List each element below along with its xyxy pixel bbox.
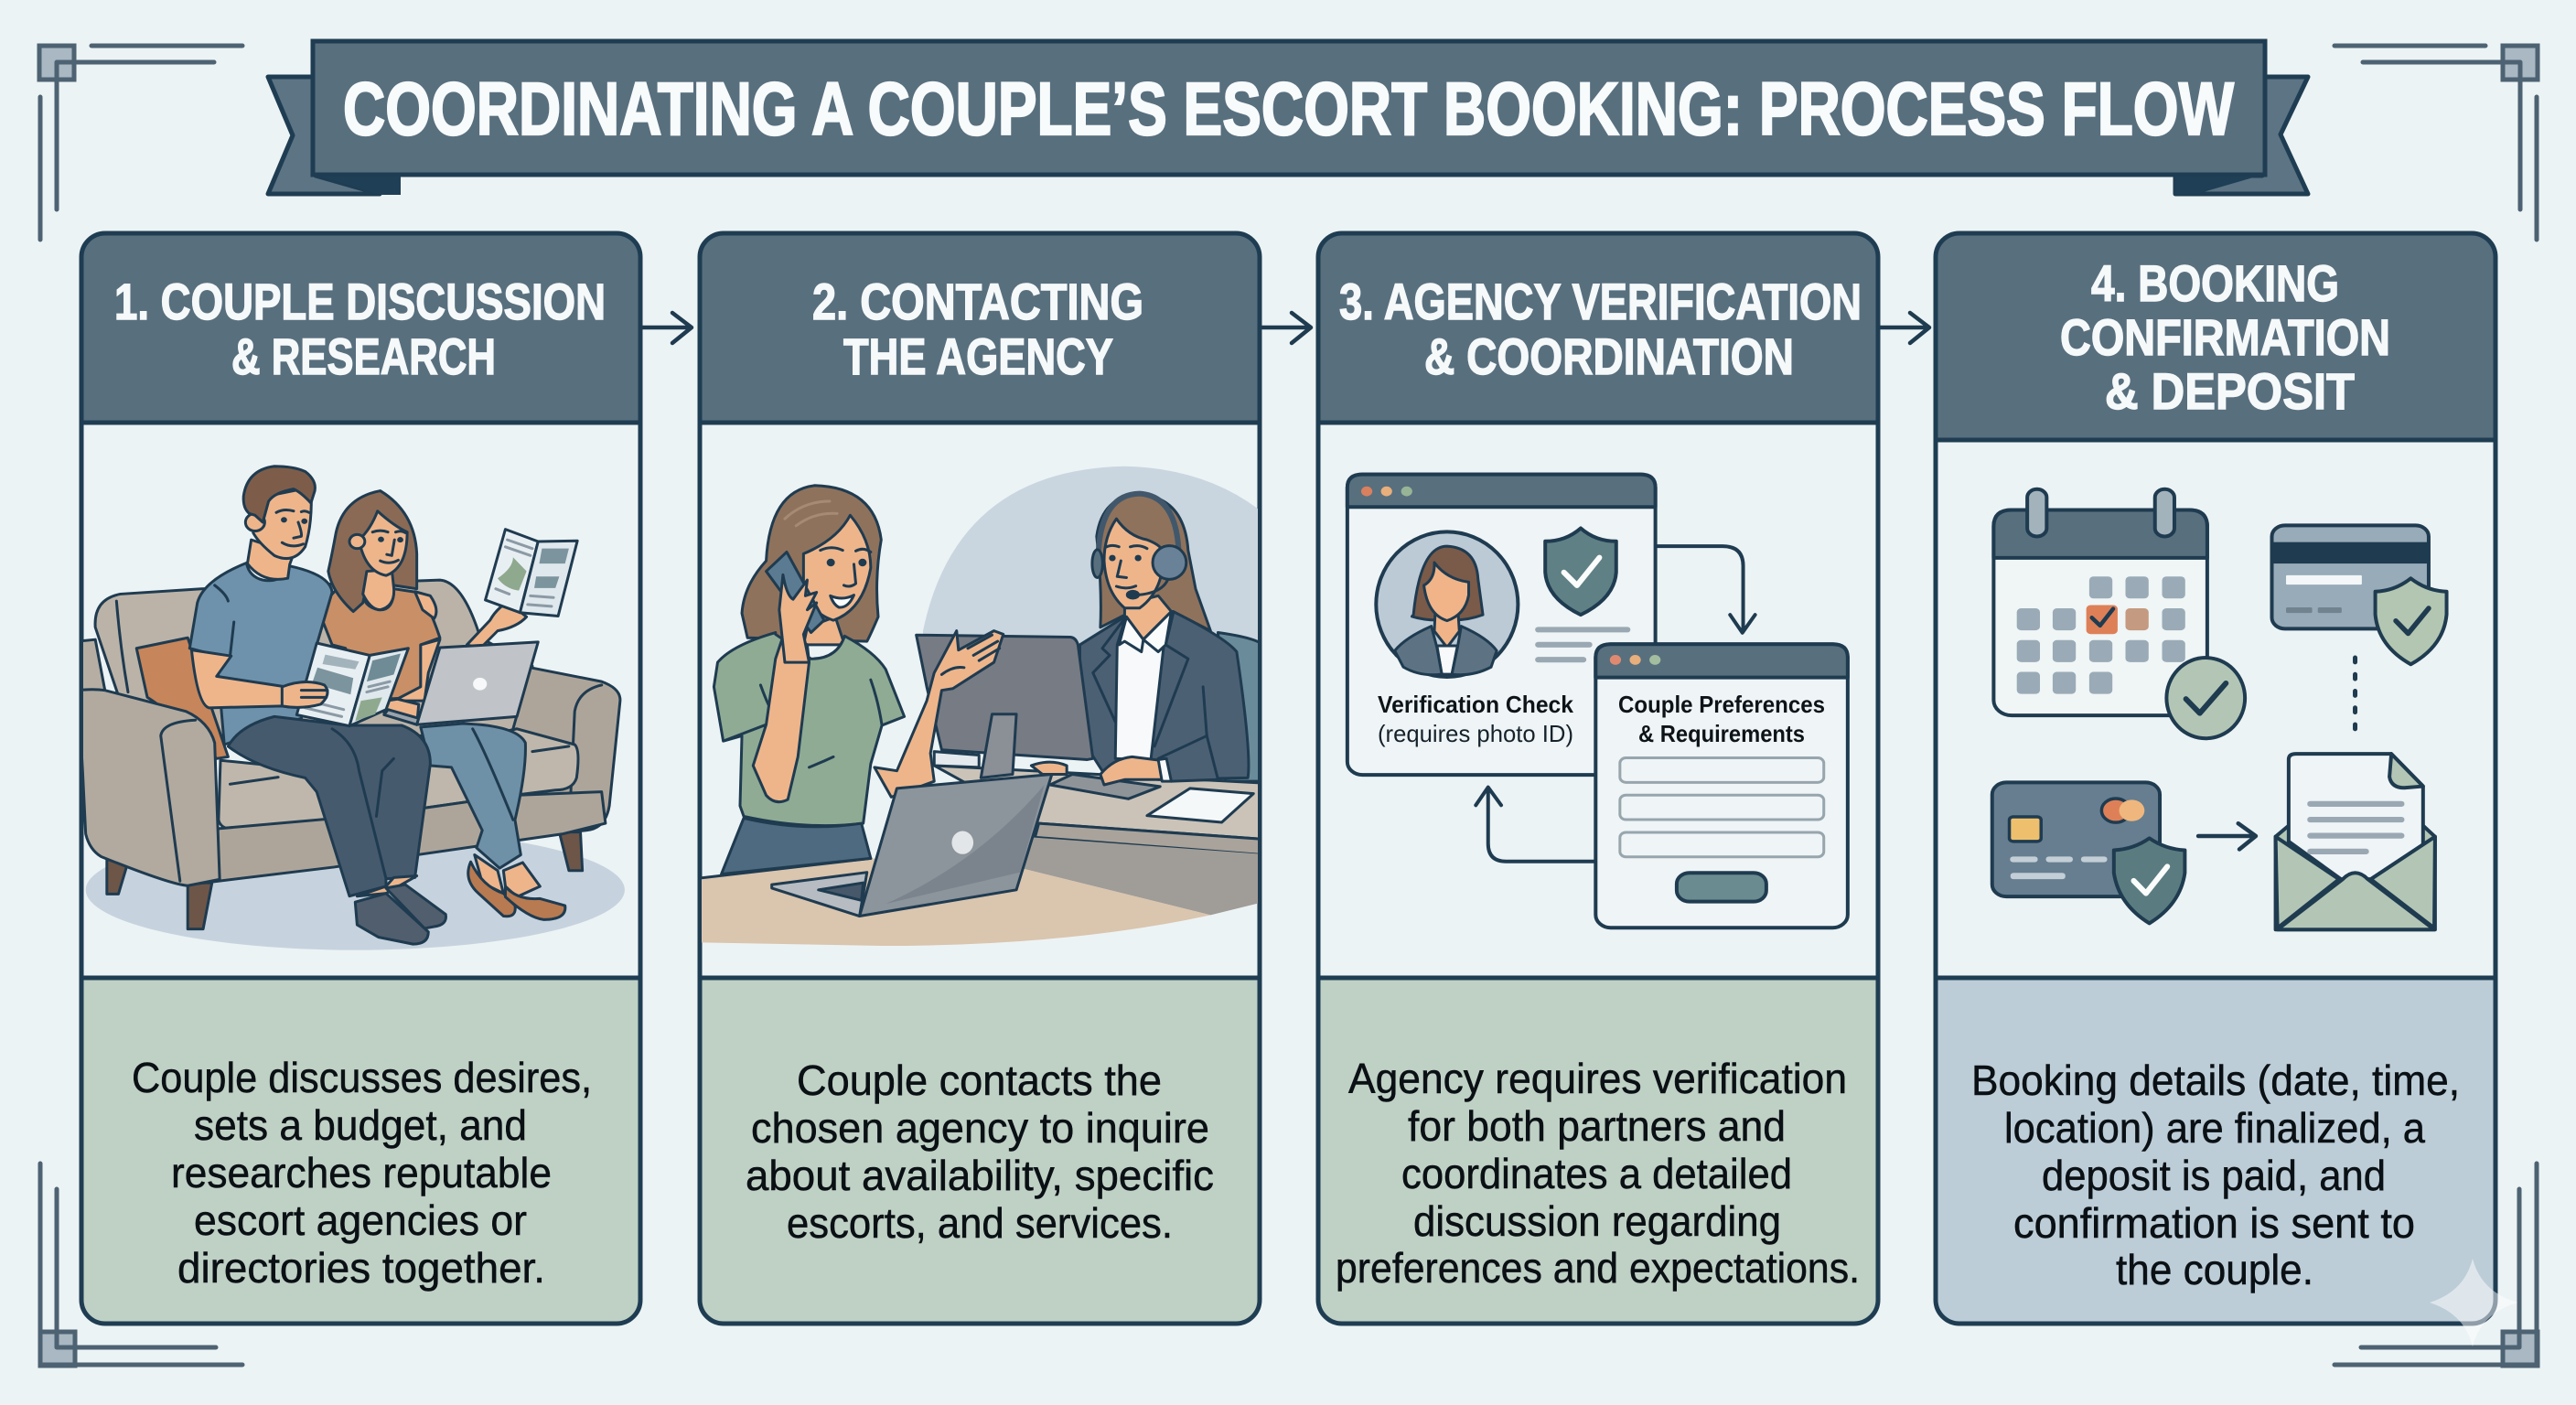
sparkle watermark: [2430, 1259, 2517, 1346]
step 3 description: preferences and expectations.: [1336, 1244, 1860, 1292]
banner body: [313, 41, 2265, 175]
panel frame: [1318, 233, 1878, 1324]
step 1 heading: & RESEARCH: [231, 327, 496, 385]
couple preferences label: & Requirements: [1638, 720, 1805, 747]
step 1 description: [132, 1054, 592, 1292]
step 4 description: deposit is paid, and: [2042, 1152, 2386, 1199]
arrow: step 1 to step 2: [642, 313, 692, 343]
step 2 description: escorts, and services.: [787, 1199, 1173, 1247]
step 4 description box: [1936, 978, 2496, 1324]
step 2 description: about availability, specific: [746, 1152, 1214, 1199]
step 4 description: location) are finalized, a: [2004, 1104, 2425, 1152]
illustration: verification windows: [1347, 475, 1848, 928]
shield check: [1545, 528, 1616, 615]
step 3 description: coordinates a detailed: [1401, 1150, 1792, 1197]
couple preferences label: Couple Preferences: [1618, 691, 1825, 718]
icon: card with shield: [2272, 525, 2447, 664]
arrow: back to verification window: [1476, 788, 1594, 862]
corner ornament: top right: [2334, 46, 2538, 240]
panel frame: [700, 233, 1260, 1324]
step 1 description: directories together.: [177, 1244, 545, 1292]
step 4 description: confirmation is sent to: [2013, 1199, 2415, 1247]
panel frame: [1936, 233, 2496, 1324]
step 2 description: [746, 1056, 1214, 1247]
icon: envelope with letter: [2276, 754, 2435, 929]
arrow: payment to confirmation: [2198, 823, 2256, 849]
step 1 description: Couple discusses desires,: [132, 1054, 592, 1101]
step 3 description: discussion regarding: [1413, 1197, 1781, 1245]
step 2 description: Couple contacts the: [797, 1056, 1162, 1104]
step 3 description: [1336, 1055, 1860, 1292]
illustration: couple on sofa: [78, 467, 625, 950]
step 3 description box: [1318, 978, 1878, 1324]
step 3 heading: 3. AGENCY VERIFICATION: [1339, 273, 1862, 330]
step 2 heading: THE AGENCY: [843, 327, 1113, 385]
step 4 heading: CONFIRMATION: [2060, 308, 2390, 366]
banner left fold: [312, 174, 401, 195]
verification check label: Verification Check: [1378, 691, 1574, 718]
step 4 heading: & DEPOSIT: [2105, 362, 2355, 420]
step 4 description: Booking details (date, time,: [1971, 1056, 2460, 1104]
photo ID portrait: [1376, 531, 1518, 677]
step 4 heading: 4. BOOKING: [2091, 254, 2339, 312]
step 2 heading: 2. CONTACTING: [812, 273, 1143, 330]
verification check label: (requires photo ID): [1378, 720, 1573, 747]
arrow: step 3 to step 4: [1880, 313, 1929, 343]
banner left tail: [268, 77, 380, 194]
step 2 description box: [700, 978, 1260, 1324]
step 4 description: [1971, 1056, 2460, 1293]
step 1 description: escort agencies or: [194, 1196, 527, 1244]
step 1 header: [81, 233, 640, 423]
title banner: [268, 41, 2308, 195]
step 3 heading: [1339, 273, 1862, 385]
couple preferences label: [1618, 691, 1825, 747]
step 2 description: chosen agency to inquire: [751, 1104, 1209, 1152]
panel frame: [81, 233, 640, 1324]
banner right fold: [2175, 174, 2266, 195]
verification check label: [1378, 691, 1574, 747]
panel: step 3 agency verification: [1318, 233, 1878, 1324]
step 1 description: researches reputable: [171, 1149, 552, 1196]
panel: step 1 couple discussion: [78, 233, 640, 1324]
illustration: customer calling agency: [695, 467, 1262, 946]
step 3 description: Agency requires verification: [1348, 1055, 1847, 1102]
step 1 description box: [81, 978, 640, 1324]
panel: step 4 booking confirmation: [1936, 233, 2496, 1324]
corner ornament: bottom right: [2334, 1164, 2538, 1366]
step 3 header: [1318, 233, 1878, 423]
preferences window: [1595, 644, 1848, 928]
verification window: [1347, 475, 1656, 775]
dotted connector: [2353, 658, 2357, 729]
step 1 heading: 1. COUPLE DISCUSSION: [114, 273, 606, 330]
step 2 header: [700, 233, 1260, 423]
arrow: to preferences window: [1658, 546, 1755, 633]
illustration: booking icons: [1992, 489, 2447, 929]
step 3 heading: & COORDINATION: [1424, 327, 1794, 385]
step 4 heading: [2060, 254, 2390, 420]
step 1 heading: [114, 273, 606, 385]
step 2 heading: [812, 273, 1143, 385]
step 4 header: [1936, 233, 2496, 440]
arrow: step 2 to step 3: [1261, 313, 1311, 343]
icon: calendar: [1993, 489, 2245, 738]
banner right tail: [2175, 77, 2308, 194]
icon: payment card with shield: [1992, 782, 2184, 923]
step 3 description: for both partners and: [1408, 1102, 1786, 1150]
step 4 description: the couple.: [2116, 1246, 2313, 1293]
corner ornament: top left: [39, 46, 242, 240]
corner ornament: bottom left: [40, 1164, 242, 1366]
panel: step 2 contacting the agency: [695, 233, 1262, 1324]
step 1 description: sets a budget, and: [194, 1101, 527, 1149]
